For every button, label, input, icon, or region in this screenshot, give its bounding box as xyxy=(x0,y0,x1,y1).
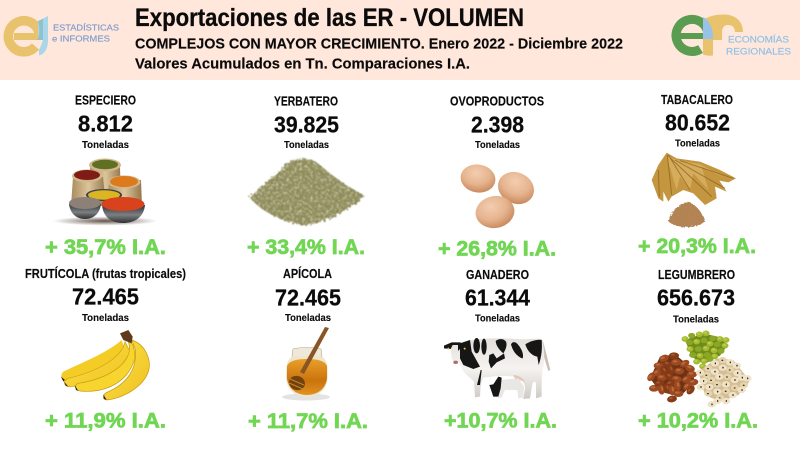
growth: + 33,4% I.A. xyxy=(247,235,365,259)
name: APÍCOLA xyxy=(283,266,332,281)
growth: + 20,3% I.A. xyxy=(638,234,756,258)
unit: Toneladas xyxy=(673,314,719,326)
panel: legumbrero xyxy=(638,268,758,433)
logo: Estadísticas e Informes: e INFORMES xyxy=(52,34,110,44)
panel: ovoproductos xyxy=(438,94,556,261)
value: 8.812 xyxy=(78,111,133,137)
unit: Toneladas xyxy=(675,138,720,150)
unit: Toneladas xyxy=(475,313,520,325)
value: 656.673 xyxy=(657,285,735,311)
icon: black-eyed beans xyxy=(696,357,751,407)
value: 72.465 xyxy=(275,284,341,310)
growth: + 35,7% I.A. xyxy=(45,235,166,259)
name: GANADERO xyxy=(466,268,529,282)
unit: Toneladas xyxy=(82,139,129,151)
value: 61.344 xyxy=(465,285,530,311)
unit: Toneladas xyxy=(284,139,329,151)
logo: Estadísticas e Informes: ESTADÍSTICAS xyxy=(53,22,119,32)
title: Exportaciones de las ER - VOLUMEN xyxy=(135,4,524,32)
icon: bananas xyxy=(61,330,149,400)
panel: yerbatero xyxy=(247,94,365,259)
unit: Toneladas xyxy=(82,312,129,324)
unit: Toneladas xyxy=(285,312,331,324)
icon: spice sacks and bowls xyxy=(53,158,157,226)
panel: ganadero xyxy=(444,268,557,433)
growth: +10,7% I.A. xyxy=(444,409,557,433)
unit: Toneladas xyxy=(475,139,520,151)
growth: + 11,9% I.A. xyxy=(45,409,166,433)
name: YERBATERO xyxy=(274,94,338,108)
name: TABACALERO xyxy=(661,93,733,107)
logo: Economías Regionales: REGIONALES xyxy=(726,46,791,56)
growth: + 10,2% I.A. xyxy=(638,409,758,433)
icon: green peas xyxy=(681,330,729,369)
icon: cow and calf xyxy=(444,338,550,399)
icon: red beans xyxy=(646,352,699,403)
subtitle line 2: Valores Acumulados en Tn. Comparaciones I.A. xyxy=(135,56,470,72)
value: 80.652 xyxy=(665,110,730,136)
header band xyxy=(0,0,800,80)
value: 39.825 xyxy=(274,112,339,138)
name: FRUTÍCOLA (frutas tropicales) xyxy=(25,266,186,281)
logo: Estadísticas e Informes xyxy=(8,16,119,56)
logo: Economías Regionales xyxy=(676,14,791,56)
icon: yerba pile xyxy=(249,159,365,225)
value: 72.465 xyxy=(72,283,139,309)
panel: especiero xyxy=(45,94,166,259)
name: ESPECIERO xyxy=(75,94,136,108)
icon: honey jar xyxy=(282,327,330,400)
name: OVOPRODUCTOS xyxy=(450,94,544,108)
name: LEGUMBRERO xyxy=(658,268,735,282)
growth: + 26,8% I.A. xyxy=(438,237,556,261)
value: 2.398 xyxy=(471,112,524,138)
subtitle line 1: COMPLEJOS CON MAYOR CRECIMIENTO. Enero 2022 - Diciembre 2022 xyxy=(135,36,623,52)
panel: frutícola xyxy=(25,266,186,433)
icon: eggs xyxy=(458,162,539,231)
panel: tabacalero xyxy=(638,93,756,258)
icon: cut tobacco pile xyxy=(668,202,705,227)
panel: apícola xyxy=(248,266,368,433)
growth: + 11,7% I.A. xyxy=(248,409,368,433)
logo: Economías Regionales: ECONOMÍAS xyxy=(728,35,789,45)
icon: tobacco leaves xyxy=(652,153,736,205)
